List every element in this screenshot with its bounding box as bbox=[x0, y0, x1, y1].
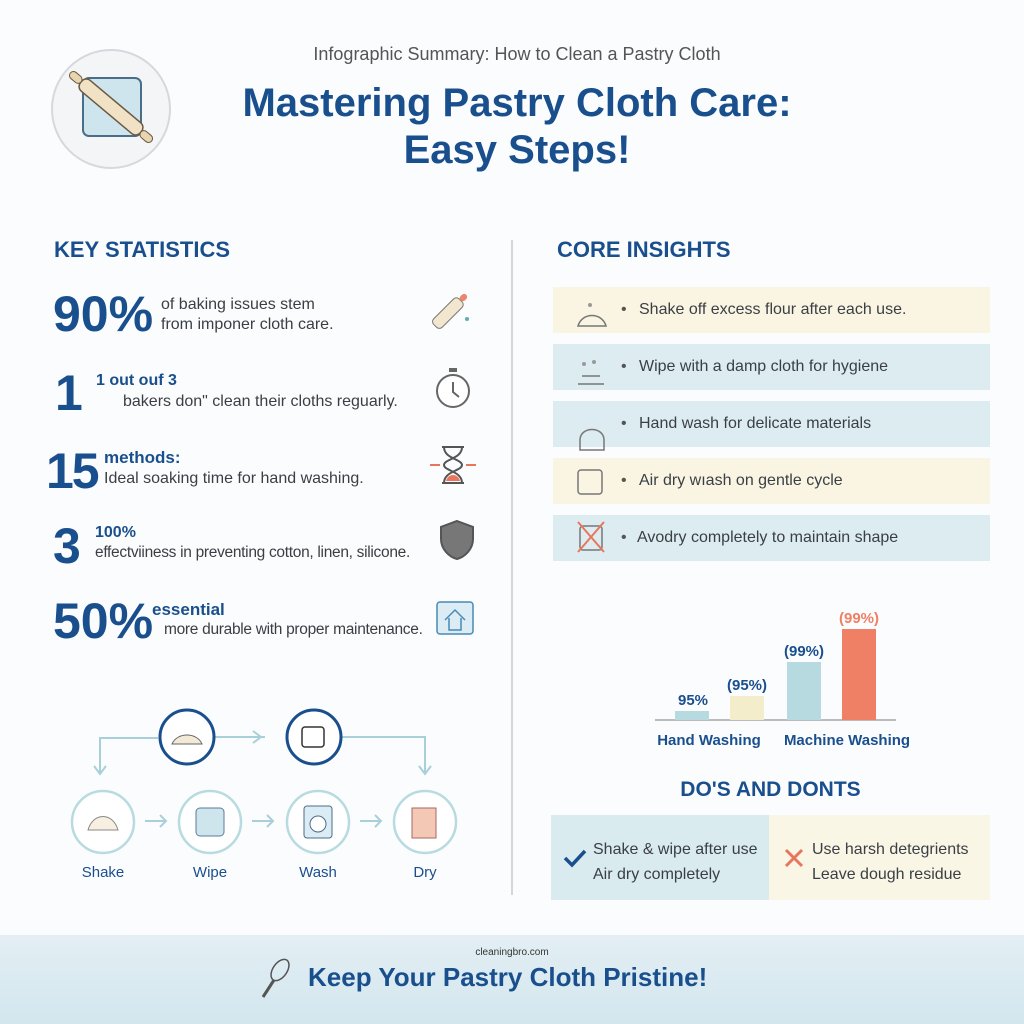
donts panel: Leave dough residue bbox=[812, 866, 961, 883]
bar chart: (99%) bbox=[784, 643, 824, 660]
bar chart: Machine Washing bbox=[784, 732, 910, 749]
insight 2: Wipe with a damp cloth for hygiene bbox=[639, 358, 888, 375]
stat 2: 1 out ouf 3 bbox=[96, 372, 177, 389]
stat 4: 3 bbox=[53, 518, 81, 574]
insight 3: Hand wash for delicate materials bbox=[639, 415, 871, 432]
icon: hourglass bbox=[430, 446, 476, 484]
stat 5: more durable with proper maintenance. bbox=[164, 621, 423, 638]
stat 3: methods: bbox=[104, 448, 180, 467]
stat 5: essential bbox=[152, 600, 225, 619]
footer banner bbox=[0, 935, 1024, 1024]
insight 2: • bbox=[621, 358, 627, 375]
stat 3: Ideal soaking time for hand washing. bbox=[104, 470, 364, 487]
stat 1: of baking issues stem bbox=[161, 296, 315, 313]
stat 5 bbox=[53, 593, 474, 649]
insight 4 bbox=[553, 458, 990, 504]
dos panel: Shake & wipe after use bbox=[593, 841, 758, 858]
stat 3: 15 bbox=[46, 443, 98, 499]
stat 2: 1 bbox=[55, 365, 83, 421]
stat 1 bbox=[53, 286, 469, 342]
stat 1: 90% bbox=[53, 286, 153, 342]
bar chart: (95%) bbox=[727, 677, 767, 694]
subtitle: Infographic Summary: How to Clean a Pastry Cloth bbox=[313, 44, 721, 64]
heading: core insights: CORE INSIGHTS bbox=[557, 237, 731, 262]
footer banner: Keep Your Pastry Cloth Pristine! bbox=[308, 962, 707, 992]
dos panel: Air dry completely bbox=[593, 866, 720, 883]
insight 1: • bbox=[621, 301, 627, 318]
insight 3 bbox=[553, 401, 990, 447]
stat 2: bakers don" clean their cloths reguarly. bbox=[123, 393, 398, 410]
insight 3: • bbox=[621, 415, 627, 432]
donts panel: Use harsh detegrients bbox=[812, 841, 969, 858]
icon: rolling pin bbox=[432, 294, 469, 329]
insight 1 bbox=[553, 287, 990, 333]
insight 4: Air dry wıash on gentle cycle bbox=[639, 472, 843, 489]
process flow bbox=[70, 708, 458, 881]
stat 4: effectviiness in preventing cotton, linen, silicone. bbox=[95, 544, 410, 561]
icon: shield bbox=[440, 520, 474, 560]
stat 3 bbox=[46, 443, 476, 499]
title bbox=[242, 81, 792, 172]
title: Mastering Pastry Cloth Care: bbox=[242, 81, 792, 125]
bar chart: 95% bbox=[678, 692, 708, 709]
insight 2 bbox=[553, 344, 990, 390]
stat 1: from imponer cloth care. bbox=[161, 316, 334, 333]
insight 5: Avodry completely to maintain shape bbox=[637, 529, 898, 546]
process flow: Wash bbox=[299, 864, 337, 881]
stat 4: 100% bbox=[95, 524, 136, 541]
dos panel bbox=[551, 815, 769, 900]
insight 4: • bbox=[621, 472, 627, 489]
process flow: Shake bbox=[82, 864, 124, 881]
footer banner: cleaningbro.com bbox=[475, 947, 549, 958]
stat 2 bbox=[55, 365, 470, 421]
stat 5: 50% bbox=[53, 593, 153, 649]
process flow: Wipe bbox=[193, 864, 227, 881]
header icon: rolling pin on cloth bbox=[51, 49, 171, 169]
process flow: Dry bbox=[413, 864, 437, 881]
bar chart bbox=[655, 610, 910, 749]
donts panel bbox=[769, 815, 990, 900]
icon: house puzzle bbox=[436, 601, 474, 635]
stat 4 bbox=[53, 518, 474, 574]
insight 5 bbox=[553, 515, 990, 561]
icon: whisk bbox=[262, 958, 290, 998]
heading: dos and donts: DO'S AND DONTS bbox=[680, 778, 861, 801]
heading: key statistics: KEY STATISTICS bbox=[54, 237, 230, 262]
bar chart: (99%) bbox=[839, 610, 879, 627]
insight 1: Shake off excess flour after each use. bbox=[639, 301, 906, 318]
insight 5: • bbox=[621, 529, 627, 546]
title: Easy Steps! bbox=[404, 128, 630, 172]
icon: stopwatch bbox=[436, 368, 470, 408]
bar chart: Hand Washing bbox=[657, 732, 761, 749]
insight icons bbox=[577, 303, 607, 553]
